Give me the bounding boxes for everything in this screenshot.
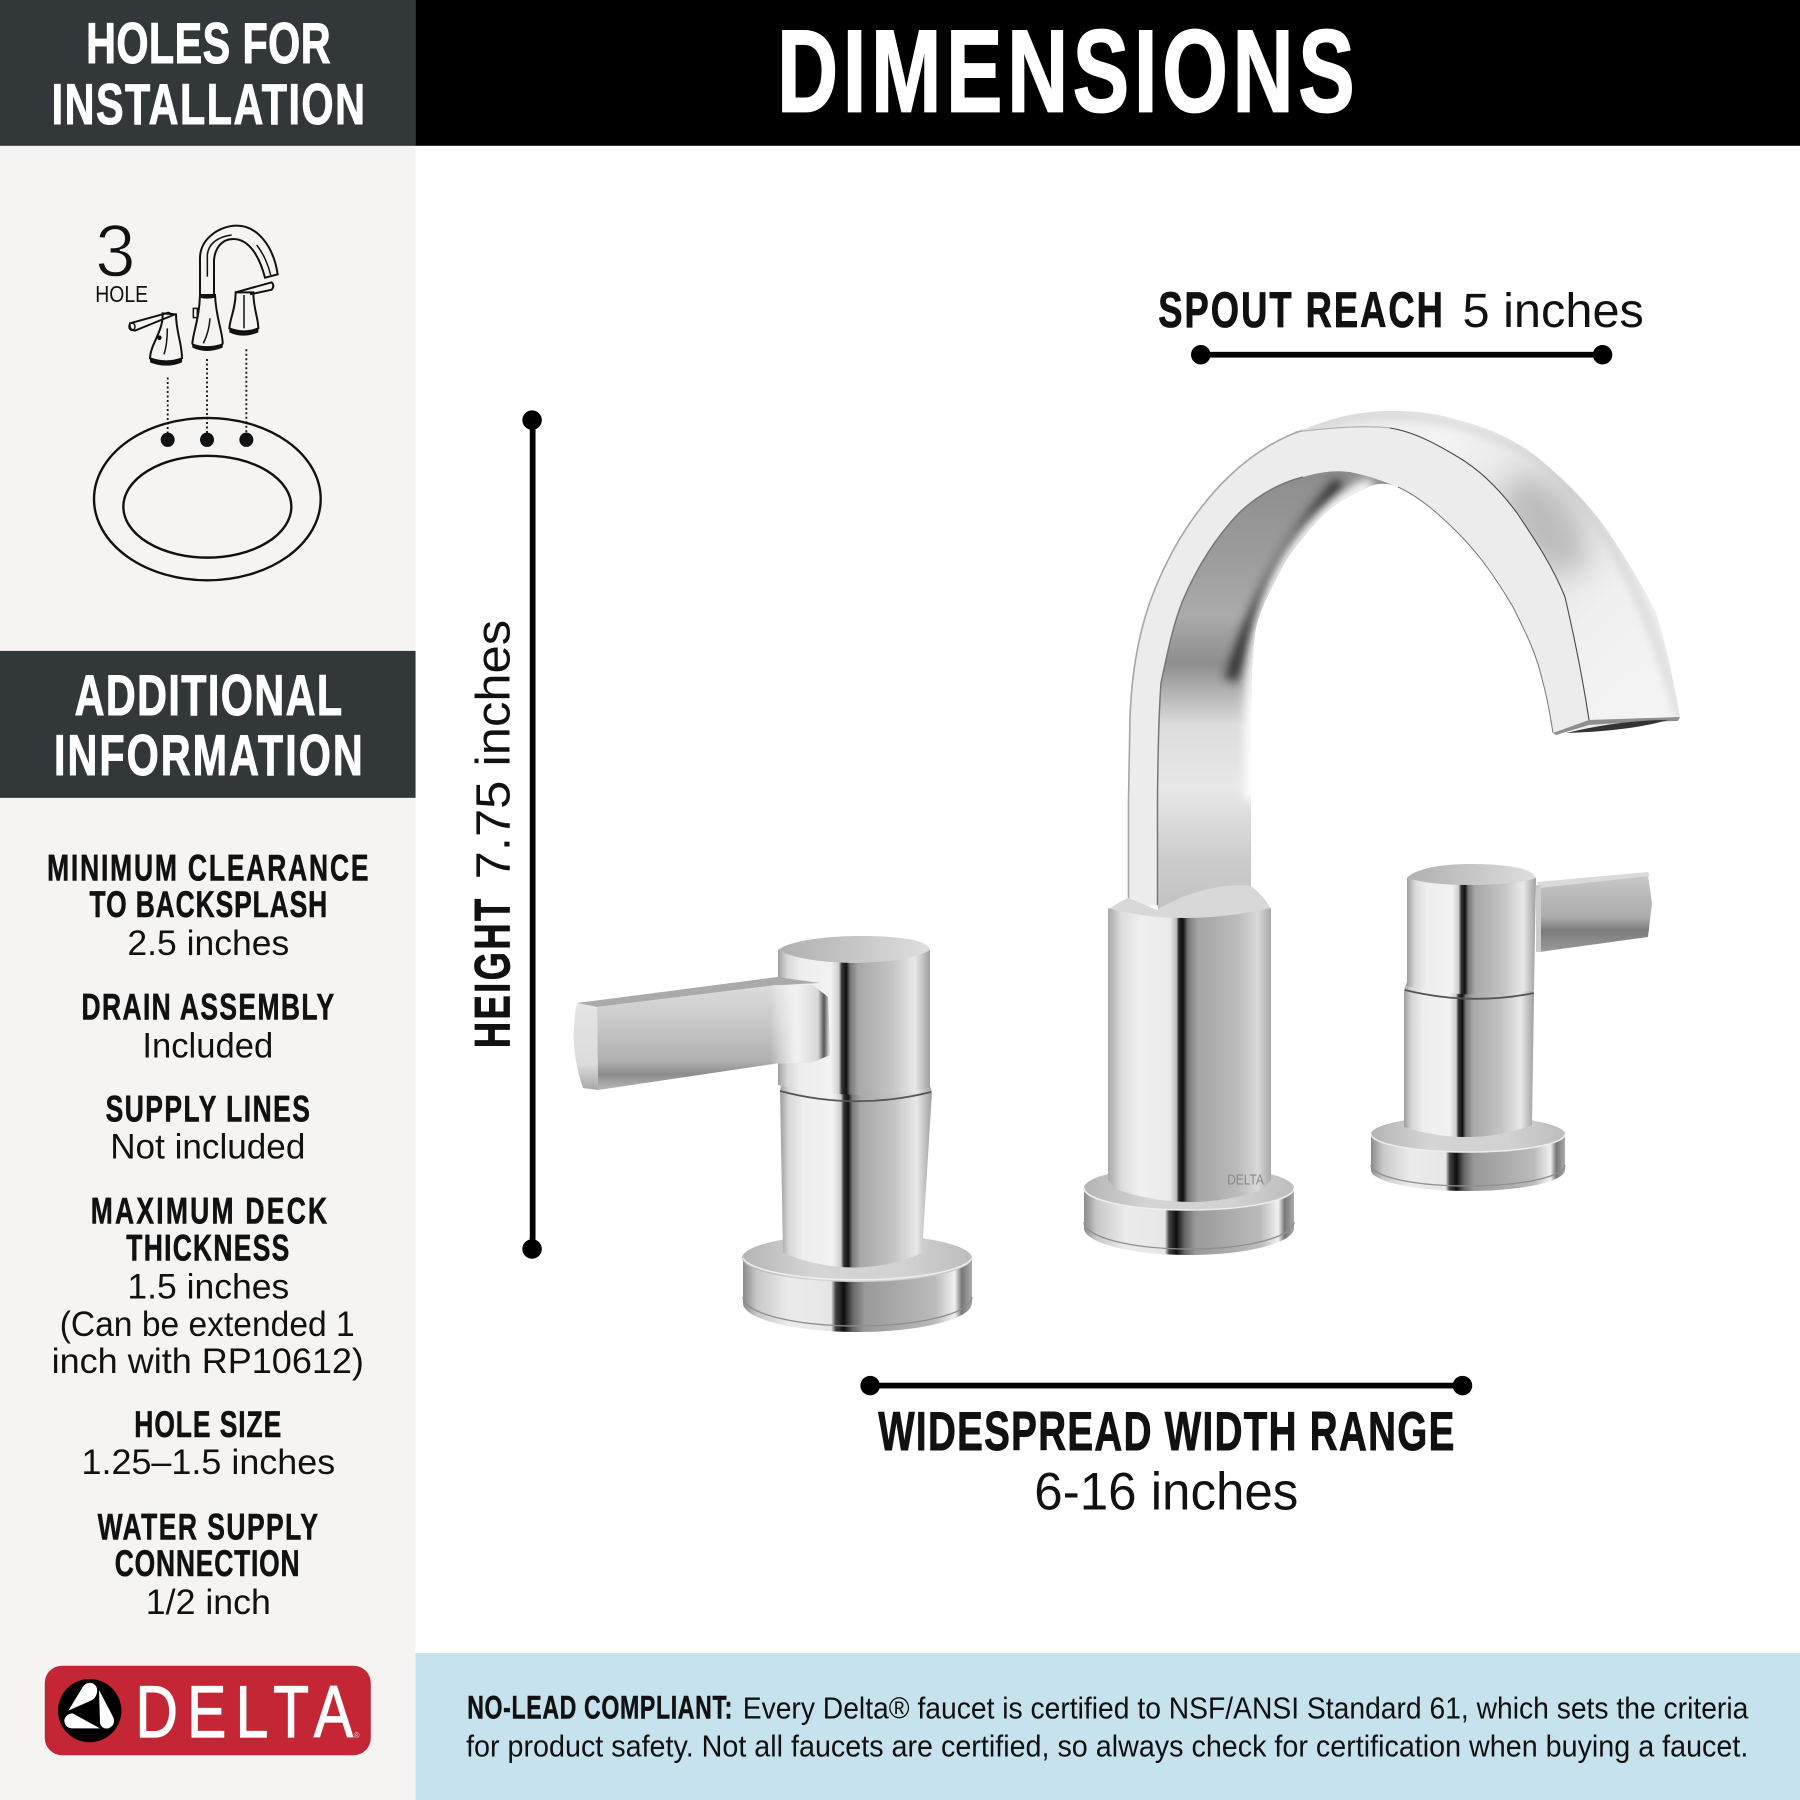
panel: title bar (416, 0, 1800, 146)
title: dimensions: DIMENSIONS (777, 6, 1355, 137)
spec: supply lines (106, 1088, 310, 1166)
spec: maximum deck thickness: MAXIMUM DECK (91, 1190, 327, 1232)
heading text (52, 11, 365, 137)
note text (466, 1690, 1749, 1763)
center body (1108, 908, 1271, 1202)
spec: maximum deck thickness: inch with RP10612) (52, 1341, 364, 1381)
heading text: INSTALLATION (52, 72, 365, 137)
logo: delta (45, 1666, 371, 1755)
spec: drain assembly (82, 986, 334, 1065)
logo mark (58, 1679, 121, 1742)
heading band: INFORMATION (54, 723, 363, 787)
faucet line drawing (129, 226, 278, 366)
callout: widespread width range (860, 1376, 1472, 1522)
spec: water supply connection: 1/2 inch (146, 1582, 271, 1622)
heading band: ADDITIONAL (75, 664, 342, 728)
panel: holes for installation heading (0, 0, 416, 146)
registered mark: ® (354, 1731, 360, 1740)
center base (1084, 1166, 1294, 1255)
note text: NO-LEAD COMPLIANT: (467, 1690, 732, 1725)
faucet brand mark: DELTA (1227, 1172, 1264, 1189)
width value: 6-16 inches (1034, 1463, 1298, 1522)
heading text: HOLES FOR (86, 11, 331, 76)
spec: maximum deck thickness: (Can be extended 1 (60, 1304, 355, 1344)
spout outer round surface (1295, 411, 1680, 720)
right handle (1371, 864, 1652, 1191)
width dimension line (860, 1376, 1472, 1395)
width label: WIDESPREAD WIDTH RANGE (878, 1401, 1454, 1463)
spec: water supply connection (98, 1506, 318, 1622)
spec: maximum deck thickness: 1.5 inches (127, 1266, 289, 1306)
spout inner recessed surface (1157, 471, 1398, 911)
hole count label (95, 209, 148, 307)
left lever (577, 977, 820, 1007)
spec: supply lines: SUPPLY LINES (106, 1088, 310, 1130)
height dimension line (522, 410, 542, 1259)
faucet photo illustration (574, 411, 1680, 1332)
spout nozzle (1553, 717, 1680, 735)
spec: maximum deck thickness: THICKNESS (126, 1227, 289, 1268)
spec: drain assembly: Included (142, 1025, 273, 1065)
spout reach label: 5 inches (1463, 284, 1644, 338)
logo wordmark: DELTA (135, 1672, 354, 1753)
spout reach label (1158, 282, 1644, 339)
center collar (1108, 885, 1271, 926)
right lever (1539, 875, 1652, 952)
spec: drain assembly: DRAIN ASSEMBLY (82, 986, 334, 1027)
spout reach label: SPOUT REACH (1158, 282, 1443, 339)
spec: minimum clearance: 2.5 inches (127, 923, 289, 963)
sidebar background (0, 0, 416, 1800)
spec: water supply connection: CONNECTION (115, 1543, 300, 1584)
heading band (0, 651, 416, 798)
left handle (574, 936, 972, 1332)
height label: HEIGHT (465, 899, 521, 1048)
spout reach dimension line (1191, 345, 1612, 364)
spec: minimum clearance (47, 847, 369, 963)
panel: no-lead compliance note (416, 1653, 1800, 1800)
callout: height (465, 410, 542, 1259)
spec: hole size: 1.25–1.5 inches (82, 1442, 335, 1482)
spec: maximum deck thickness (52, 1190, 364, 1381)
spec: minimum clearance: TO BACKSPLASH (90, 884, 327, 925)
callout: spout reach (1158, 282, 1644, 364)
spec: hole size (82, 1404, 335, 1482)
height label (465, 620, 521, 1048)
height label: 7.75 inches (467, 620, 521, 879)
panel: additional information (0, 651, 416, 1622)
hole count label: HOLE (95, 281, 148, 307)
spout (1128, 411, 1680, 911)
spec: supply lines: Not included (110, 1126, 305, 1166)
spec: minimum clearance: MINIMUM CLEARANCE (47, 847, 369, 889)
sink line drawing (94, 349, 321, 580)
spec: water supply connection: WATER SUPPLY (98, 1506, 318, 1547)
icon: 3-hole faucet and sink diagram (94, 209, 321, 580)
hole count label: 3 (95, 209, 135, 293)
spec: hole size: HOLE SIZE (134, 1404, 281, 1445)
